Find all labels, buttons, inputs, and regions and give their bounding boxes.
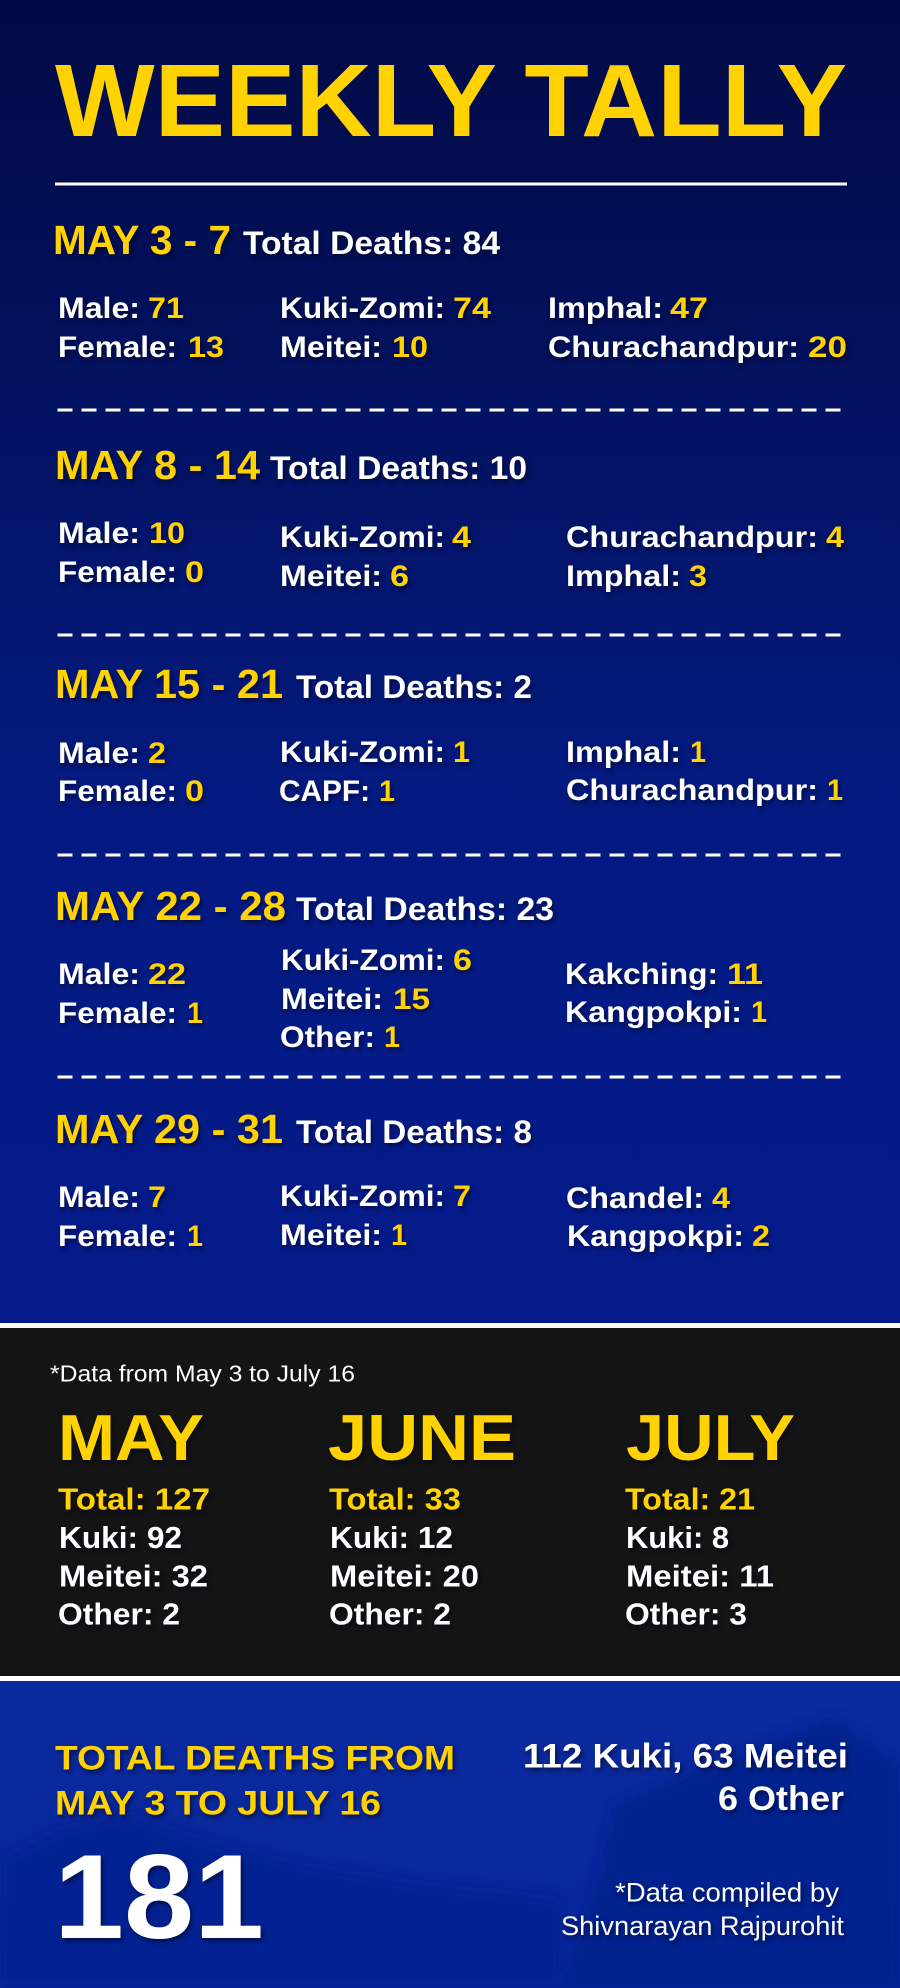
gender counts: 1 (187, 997, 203, 1030)
panel: May 15-21 (55, 661, 843, 808)
column: May (58, 1401, 210, 1632)
panel: overall total (0, 1681, 900, 1988)
gender counts: 0 (185, 775, 204, 808)
panel: May 22-28 (55, 883, 767, 1054)
white band bottom of monthly panel (0, 1676, 900, 1681)
gender counts (58, 737, 204, 808)
gender counts: Female: (58, 775, 177, 808)
district counts: Kakching: (565, 958, 718, 991)
gender counts: Male: (58, 958, 140, 991)
title: WEEKLY TALLY (55, 43, 847, 158)
panel: May 3-7 (53, 217, 847, 364)
gender counts: Female: (58, 997, 177, 1030)
district counts: 1 (751, 996, 767, 1029)
column: May: Other: 2 (58, 1596, 180, 1632)
gender counts: 7 (148, 1181, 166, 1214)
community counts: Meitei: (280, 1219, 382, 1252)
column: May: Total: 127 (58, 1482, 210, 1516)
gender counts: Male: (58, 517, 140, 550)
gender counts: Male: (58, 292, 140, 325)
district counts: Kangpokpi: (565, 996, 742, 1029)
district counts: 1 (827, 774, 843, 807)
district counts (548, 292, 847, 364)
gender counts (58, 292, 224, 364)
community counts: Meitei: (280, 560, 382, 593)
gender counts: 2 (148, 737, 166, 770)
district counts: 3 (689, 560, 707, 593)
column: June: JUNE (328, 1401, 516, 1474)
credit: *Data compiled by (615, 1878, 840, 1908)
district counts: Kangpokpi: (567, 1220, 744, 1253)
community counts: Other: (280, 1021, 375, 1054)
district counts (566, 736, 843, 807)
district counts: 20 (808, 331, 847, 364)
column: June: Kuki: 12 (330, 1520, 453, 1555)
heading: May 8-14: MAY 8 - 14 (55, 442, 260, 488)
panel: May 8-14 (55, 442, 845, 593)
community counts (280, 521, 472, 593)
gender counts: 0 (185, 556, 204, 589)
heading: May 3-7: Total Deaths: 84 (243, 225, 500, 261)
district counts: 11 (727, 958, 763, 991)
gender counts (58, 1181, 203, 1253)
heading: May 22-28 (55, 883, 554, 929)
community counts (280, 944, 472, 1054)
heading: May 8-14: Total Deaths: 10 (270, 450, 527, 486)
gender counts: 1 (187, 1220, 203, 1253)
community counts: 7 (453, 1180, 471, 1213)
community counts (280, 292, 492, 364)
community counts: 1 (453, 736, 470, 769)
community counts: 1 (391, 1219, 407, 1252)
total number: 181 (54, 1830, 264, 1964)
heading: May 29-31: MAY 29 - 31 (55, 1106, 283, 1152)
gender counts: Female: (58, 1220, 177, 1253)
column: July: Other: 3 (625, 1596, 747, 1632)
community counts: 1 (379, 775, 395, 808)
district counts: Churachandpur: (566, 521, 818, 554)
gender counts: Female: (58, 556, 177, 589)
community counts: 1 (384, 1021, 400, 1054)
community counts: Kuki-Zomi: (280, 1180, 445, 1213)
total deaths heading: MAY 3 TO JULY 16 (55, 1784, 381, 1822)
community counts: 6 (453, 944, 472, 977)
community breakdown: 6 Other (718, 1780, 844, 1818)
community counts (280, 1180, 471, 1252)
community counts: Kuki-Zomi: (280, 292, 445, 325)
column: June: Total: 33 (329, 1482, 461, 1516)
district counts: 4 (712, 1182, 731, 1215)
district counts: Churachandpur: (548, 331, 799, 364)
gender counts: 13 (188, 331, 224, 364)
credit: Shivnarayan Rajpurohit (561, 1911, 845, 1941)
heading: May 3-7: MAY 3 - 7 (53, 217, 231, 263)
column: June: Meitei: 20 (330, 1558, 479, 1594)
community counts: Meitei: (281, 983, 383, 1016)
background: blue gradient (0, 0, 900, 1324)
panel: monthly totals (0, 1328, 900, 1676)
district counts: Imphal: (548, 292, 663, 325)
community breakdown (523, 1738, 848, 1818)
column: May: MAY (58, 1401, 204, 1474)
district counts: Imphal: (566, 560, 681, 593)
heading: May 15-21: Total Deaths: 2 (296, 669, 532, 705)
gender counts: Male: (58, 737, 140, 770)
total deaths heading: TOTAL DEATHS FROM (55, 1740, 455, 1778)
column: July: Total: 21 (625, 1482, 755, 1516)
district counts (566, 1182, 770, 1253)
district counts (565, 958, 767, 1029)
column: July: JULY (626, 1401, 795, 1474)
district counts: Churachandpur: (566, 774, 818, 807)
heading: May 15-21 (55, 661, 532, 707)
heading: May 22-28: MAY 22 - 28 (55, 883, 286, 929)
total deaths heading (55, 1740, 455, 1822)
heading: May 29-31 (55, 1106, 532, 1152)
community counts: CAPF: (279, 775, 370, 808)
community counts: 10 (392, 331, 428, 364)
column: July: Kuki: 8 (626, 1520, 729, 1555)
community counts: 15 (393, 983, 430, 1016)
heading: May 8-14 (55, 442, 527, 488)
column: July (625, 1401, 795, 1632)
district counts (566, 521, 845, 593)
gender counts (58, 958, 203, 1030)
column: May: Meitei: 32 (59, 1558, 208, 1594)
column: July: Meitei: 11 (626, 1558, 774, 1594)
community counts: Kuki-Zomi: (281, 944, 445, 977)
heading: May 22-28: Total Deaths: 23 (296, 891, 554, 927)
community counts: Kuki-Zomi: (280, 521, 445, 554)
district counts: 2 (752, 1220, 770, 1253)
gender counts: Male: (58, 1181, 140, 1214)
gender counts: Female: (58, 331, 177, 364)
title rule (55, 182, 847, 186)
community counts: Kuki-Zomi: (280, 736, 445, 769)
community counts: Meitei: (280, 331, 382, 364)
district counts: 4 (826, 521, 845, 554)
panel: May 29-31 (55, 1106, 770, 1253)
data range note: *Data from May 3 to July 16 (50, 1360, 355, 1386)
heading: May 29-31: Total Deaths: 8 (296, 1114, 532, 1150)
column: June: Other: 2 (329, 1596, 451, 1632)
gender counts: 71 (148, 292, 184, 325)
community counts: 6 (390, 560, 409, 593)
white band top of monthly panel (0, 1323, 900, 1328)
district counts: Imphal: (566, 736, 681, 769)
heading: May 15-21: MAY 15 - 21 (55, 661, 283, 707)
gender counts: 22 (148, 958, 186, 991)
background silhouette: burnt houses (0, 1718, 900, 1988)
column: May: Kuki: 92 (59, 1520, 182, 1555)
district counts: Chandel: (566, 1182, 704, 1215)
column: June (328, 1401, 516, 1632)
community counts (279, 736, 470, 808)
community counts: 74 (453, 292, 492, 325)
gender counts (58, 517, 204, 589)
community counts: 4 (452, 521, 472, 554)
credit (561, 1878, 845, 1941)
community breakdown: 112 Kuki, 63 Meitei (523, 1738, 848, 1776)
gender counts: 10 (149, 517, 185, 550)
district counts: 47 (670, 292, 708, 325)
heading: May 3-7 (53, 217, 500, 263)
district counts: 1 (690, 736, 706, 769)
